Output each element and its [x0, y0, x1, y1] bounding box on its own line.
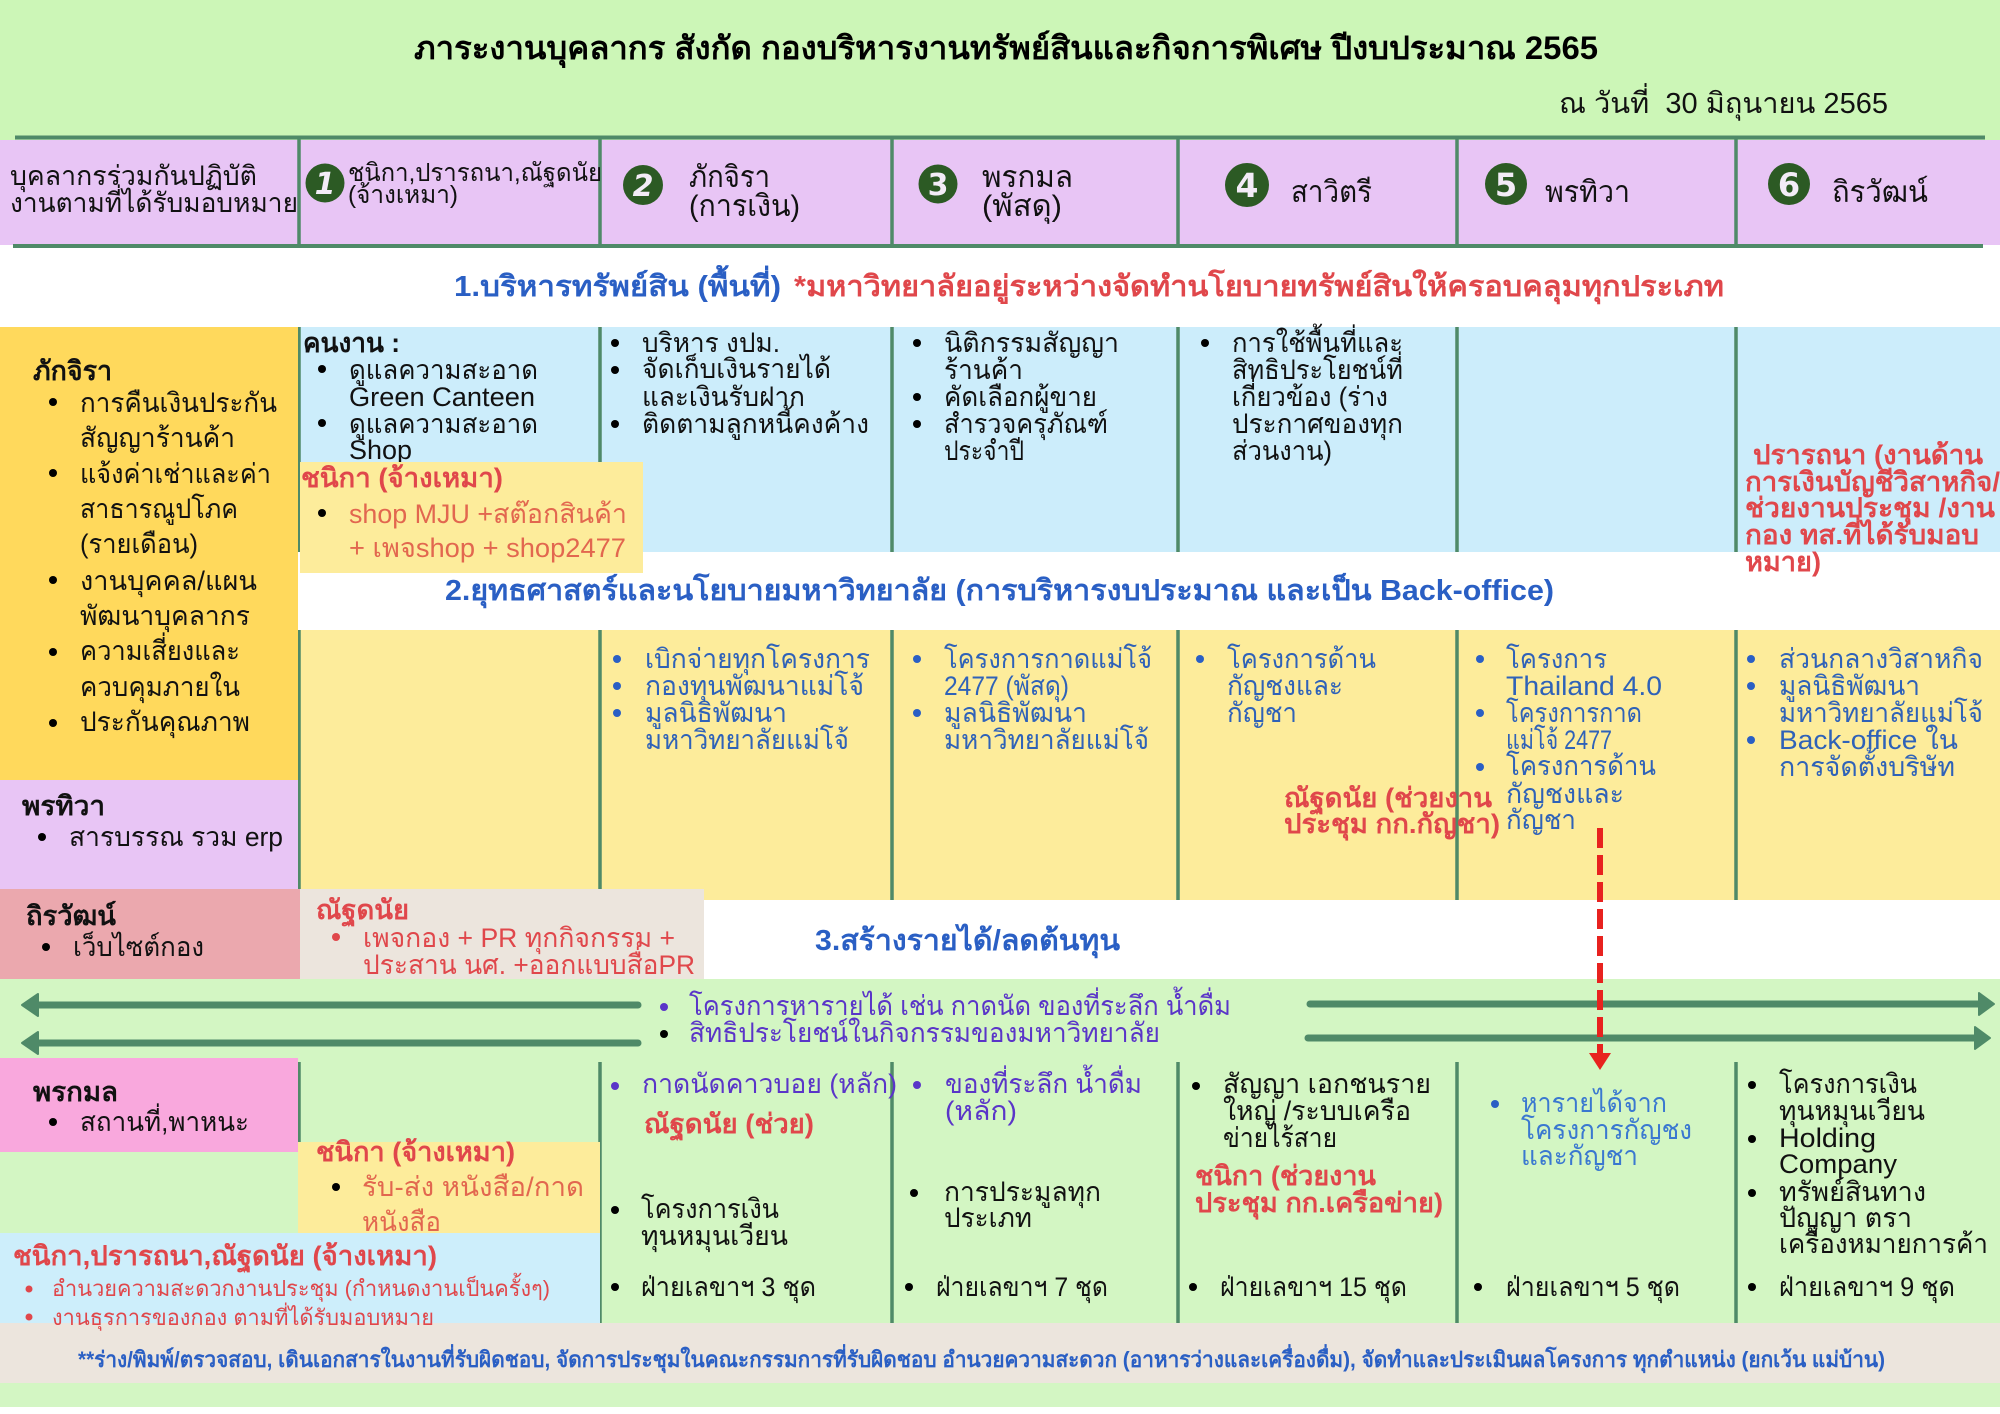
lower column 3: การประมูลทุก: [944, 1177, 1101, 1209]
row 2 column 2: มูลนิธิพัฒนา: [645, 698, 787, 729]
row 2 column 6: Back-office ใน: [1779, 724, 1958, 755]
callout: ชนิกา shop: shop MJU +สต๊อกสินค้า: [349, 499, 627, 529]
header: column 2: [623, 161, 800, 223]
row 2 column 5: กัญชา: [1506, 805, 1576, 835]
panel: ภักจิรา: ความเสี่ยงและ: [80, 632, 240, 666]
lower column 5: หารายได้จาก: [1521, 1088, 1667, 1118]
row 1 column 2: และเงินรับฝาก: [642, 382, 805, 412]
lower column 5: และกัญชา: [1521, 1141, 1638, 1171]
lower column 4: ใหญ่ /ระบบเครือ: [1223, 1095, 1411, 1126]
lower column 3: ฝ่ายเลขาฯ 7 ชุด: [936, 1272, 1108, 1304]
lower column 5: [1474, 1088, 1692, 1304]
panel: ภักจิรา: การคืนเงินประกัน: [80, 388, 277, 418]
panel: row 1 background: [299, 327, 2000, 552]
row 1 column 3: คัดเลือกผู้ขาย: [944, 382, 1097, 413]
header: intro label: บุคลากรร่วมกันปฏิบัติ: [10, 161, 257, 193]
lower column 4: ฝ่ายเลขาฯ 15 ชุด: [1220, 1272, 1407, 1304]
panel: พรทิวา: สารบรรณ รวม erp: [69, 822, 283, 852]
callout: ณัฐดนัย PR: [300, 889, 704, 980]
lower column 2: ณัฐดนัย (ช่วย): [644, 1109, 814, 1142]
header: column 6: [1768, 163, 1928, 209]
row 2 column 6: มูลนิธิพัฒนา: [1779, 671, 1920, 702]
callout: ชนิกา shop: [300, 462, 643, 573]
arrow: right bottom: [1308, 1027, 1990, 1049]
lower column 4: ประชุม กก.เครือข่าย): [1195, 1188, 1443, 1220]
callout: hired staff: [0, 1233, 600, 1331]
row 2 column 2: มหาวิทยาลัยแม่โจ้: [645, 725, 849, 755]
row 2 column 5: แม่โจ้ 2477: [1506, 725, 1612, 755]
section heading 3: 3.สร้างรายได้/ลดต้นทุน: [815, 923, 1120, 958]
callout: ปรารถนา: [1745, 440, 2000, 577]
header: column 1: 1: [315, 167, 335, 202]
arrow: left bottom: [22, 1032, 638, 1054]
row 2 column 5: กัญชงและ: [1506, 779, 1624, 809]
text: income projects: [660, 986, 1231, 1048]
header: column 1: (จ้างเหมา): [348, 181, 458, 209]
panel: พรทิวา: พรทิวา: [22, 791, 105, 821]
date: ณ วันที่ 30 มิถุนายน 2565: [1559, 83, 1888, 121]
header: column 6: 6: [1778, 166, 1800, 204]
section heading 1: [454, 264, 1724, 304]
lower column 4: [1189, 1069, 1443, 1304]
row 1 column 2: [611, 328, 869, 440]
row 1 column 4: [1201, 323, 1403, 466]
row 1 column 1: workers: คนงาน :: [303, 328, 400, 358]
panel: ภักจิรา: ประกันคุณภาพ: [80, 707, 250, 739]
row 1 column 2: ติดตามลูกหนี้คงค้าง: [642, 404, 869, 440]
header: column 2: 2: [633, 169, 653, 204]
panel: ภักจิรา: ควบคุมภายใน: [80, 671, 240, 704]
panel: ภักจิรา: ภักจิรา: [33, 356, 112, 386]
callout: ปรารถนา: หมาย): [1745, 547, 1821, 577]
callout: hired staff: งานธุรการของกอง ตามที่ได้รับมอบหมาย: [52, 1302, 434, 1331]
header: column 6: ถิรวัฒน์: [1832, 175, 1928, 209]
header: column 5: [1485, 163, 1630, 209]
row 1 column 1: workers: ดูแลความสะอาด: [349, 355, 538, 386]
header: column 2: ภักจิรา: [689, 161, 770, 194]
row 2 column 5: โครงการกาด: [1506, 698, 1642, 728]
lower column 2: กาดนัดคาวบอย (หลัก): [642, 1069, 897, 1099]
callout: ปรารถนา: ช่วยงานประชุม /งาน: [1745, 493, 1996, 525]
row 2 column 5: Thailand 4.0: [1506, 671, 1662, 701]
panel: พรกมล: [0, 1058, 298, 1152]
lower column 5: โครงการกัญชง: [1521, 1115, 1692, 1145]
header: column 3: พรกมล: [982, 161, 1073, 194]
header: column 2: (การเงิน): [689, 190, 800, 223]
callout: ณัฐดนัย PR: ประสาน นศ. +ออกแบบสื่อPR: [363, 946, 695, 980]
callout: ณัฐดนัย PR: ณัฐดนัย: [316, 895, 409, 928]
row 2 column 3: 2477 (พัสดุ): [944, 671, 1069, 703]
header: column 3: 3: [928, 168, 948, 203]
section heading 1: *มหาวิทยาลัยอยู่ระหว่างจัดทำนโยบายทรัพย์สินให้ครอบคลุมทุกประเภท: [794, 268, 1724, 304]
row 1 column 3: [913, 328, 1119, 466]
panel: row 2 background: [299, 630, 2000, 900]
header row: [0, 138, 2000, 247]
header: column 1: [306, 159, 602, 209]
lower column 6: เครื่องหมายการค้า: [1779, 1225, 1988, 1259]
row 1 column 4: ประกาศของทุก: [1232, 409, 1403, 441]
lower column 6: Holding: [1779, 1123, 1876, 1153]
panel: ภักจิรา: พัฒนาบุคลากร: [80, 601, 250, 633]
lower column 2: ฝ่ายเลขาฯ 3 ชุด: [641, 1272, 816, 1304]
row 1 column 2: จัดเก็บเงินรายได้: [642, 351, 831, 384]
panel: ภักจิรา: งานบุคคล/แผน: [80, 566, 257, 598]
lower column 5: ฝ่ายเลขาฯ 5 ชุด: [1506, 1272, 1680, 1304]
callout: hired staff: อำนวยความสะดวกงานประชุม (กำหนดงานเป็นครั้งๆ): [52, 1273, 550, 1302]
row 1 column 1: workers: Shop: [349, 435, 412, 465]
footer note: [0, 1323, 2000, 1383]
arrow: red dashed: [1589, 828, 1611, 1070]
row 2 column 4: โครงการด้าน: [1227, 644, 1376, 674]
lower column 3: [905, 1064, 1142, 1304]
callout: ปรารถนา: การเงินบัญชีวิสาหกิจ/: [1745, 467, 2000, 498]
row 2 column 3: โครงการกาดแม่โจ้: [944, 644, 1152, 674]
header: column 4: [1225, 163, 1372, 209]
row 2 column 4: กัญชงและ: [1227, 671, 1343, 701]
panel: ภักจิรา: สัญญาร้านค้า: [80, 423, 235, 453]
header: intro label: [10, 161, 298, 218]
lower column 6: โครงการเงิน: [1779, 1069, 1917, 1099]
panel: พรกมล: สถานที่,พาหนะ: [80, 1103, 249, 1137]
lower column 3: ประเภท: [944, 1203, 1032, 1233]
panel: ภักจิรา: แจ้งค่าเช่าและค่า: [80, 459, 271, 489]
row 1 column 3: ประจำปี: [944, 436, 1024, 466]
panel: ภักจิรา: (รายเดือน): [80, 529, 198, 559]
panel: ภักจิรา: สาธารณูปโภค: [80, 494, 238, 525]
lower column 4: ชนิกา (ช่วยงาน: [1195, 1161, 1377, 1191]
lower column 6: Company: [1779, 1149, 1898, 1179]
lower column 3: (หลัก): [945, 1096, 1017, 1126]
panel: ถิรวัฒน์: เว็บไซต์กอง: [73, 929, 204, 962]
callout: ณัฐดนัย PR: เพจกอง + PR ทุกกิจกรรม +: [363, 923, 675, 955]
header: column 4: สาวิตรี: [1291, 176, 1372, 209]
footer note: **ร่าง/พิมพ์/ตรวจสอบ, เดินเอกสารในงานที่รับผิดชอบ, จัดการประชุมในคณะกรรมการที่รับผิดชอบ อำนวยความสะดวก (อาหารว่างและเครื่องดื่ม), จัดทำและประเมินผลโครงการ ทุกตำแหน่ง (ยกเว้น แม่บ้าน): [78, 1343, 1885, 1374]
row 1 column 1: workers: [303, 328, 538, 465]
lower column 3: ของที่ระลึก น้ำดื่ม: [945, 1064, 1142, 1099]
header: column 3: [918, 161, 1073, 225]
row 2 column 2: กองทุนพัฒนาแม่โจ้: [645, 671, 864, 703]
row 2 column 5: [1476, 644, 1662, 835]
row 2 column 3: [913, 644, 1152, 755]
panel: ถิรวัฒน์: [0, 889, 300, 979]
header: column 5: 5: [1495, 166, 1517, 204]
header: intro label: งานตามที่ได้รับมอบหมาย: [10, 184, 298, 218]
panel: ภักจิรา: [0, 327, 298, 780]
row 1 column 3: นิติกรรมสัญญา: [944, 328, 1119, 358]
callout: ปรารถนา: กอง ทส.ที่ได้รับมอบ: [1745, 515, 1979, 550]
lower column 2: [611, 1069, 897, 1304]
section heading 1: 1.บริหารทรัพย์สิน (พื้นที่): [454, 264, 781, 303]
lower column 6: [1748, 1069, 1988, 1304]
text: income projects: สิทธิประโยชน์ในกิจกรรมของมหาวิทยาลัย: [689, 1017, 1160, 1048]
callout: ณัฐดนัย กัญชา: ณัฐดนัย (ช่วยงาน: [1284, 783, 1493, 816]
row 2 column 5: โครงการ: [1506, 644, 1607, 674]
callout: ชนิกา shop: ชนิกา (จ้างเหมา): [301, 463, 503, 493]
header: column 3: (พัสดุ): [982, 190, 1062, 225]
row 1 column 4: สิทธิประโยชน์ที่: [1232, 351, 1403, 385]
row 1 column 4: ส่วนงาน): [1232, 436, 1332, 466]
row 1 column 3: สำรวจครุภัณฑ์: [944, 408, 1108, 441]
row 2 column 3: มูลนิธิพัฒนา: [944, 698, 1087, 729]
lower column 2: โครงการเงิน: [641, 1194, 779, 1224]
header: column 1: ชนิกา,ปรารถนา,ณัฐดนัย: [348, 159, 602, 187]
row 2 column 4: กัญชา: [1227, 698, 1297, 728]
row 1 column 4: การใช้พื้นที่และ: [1232, 323, 1403, 358]
callout: ชนิกา books: หนังสือ: [362, 1207, 441, 1237]
callout: ณัฐดนัย กัญชา: [1284, 783, 1500, 841]
text: income projects: โครงการหารายได้ เช่น กาดนัด ของที่ระลึก น้ำดื่ม: [689, 986, 1231, 1021]
section heading 2: 2.ยุทธศาสตร์และนโยบายมหาวิทยาลัย (การบริหารงบประมาณ และเป็น Back-office): [445, 572, 1554, 608]
lower column 2: ทุนหมุนเวียน: [641, 1221, 788, 1253]
row 2 column 6: [1747, 644, 1983, 782]
panel: พรทิวา: [0, 780, 298, 890]
lower column 6: ฝ่ายเลขาฯ 9 ชุด: [1779, 1272, 1955, 1304]
lower column 6: ปัญญา ตรา: [1779, 1203, 1912, 1233]
row 2 column 3: มหาวิทยาลัยแม่โจ้: [944, 725, 1149, 755]
header: column 4: 4: [1236, 166, 1258, 205]
arrow: right top: [1310, 993, 1994, 1015]
arrow: left top: [22, 994, 638, 1016]
lower column 6: ทรัพย์สินทาง: [1779, 1176, 1926, 1207]
row 2 column 5: โครงการด้าน: [1506, 751, 1656, 781]
row 1 column 2: บริหาร งปม.: [642, 328, 780, 358]
row 1 column 1: workers: ดูแลความสะอาด: [349, 409, 538, 440]
row 1 column 4: เกี่ยวข้อง (ร่าง: [1232, 378, 1388, 412]
row 1 column 1: workers: Green Canteen: [349, 382, 535, 412]
lower column 6: ทุนหมุนเวียน: [1779, 1096, 1925, 1128]
lower column 4: สัญญา เอกชนราย: [1223, 1069, 1431, 1099]
row 1 column 3: ร้านค้า: [944, 355, 1023, 385]
row 2 column 4: [1196, 644, 1376, 728]
row 2 column 6: ส่วนกลางวิสาหกิจ: [1779, 644, 1983, 674]
callout: hired staff: ชนิกา,ปรารถนา,ณัฐดนัย (จ้างเหมา): [13, 1241, 437, 1274]
row 2 column 2: เบิกจ่ายทุกโครงการ: [645, 644, 870, 676]
callout: ชนิกา books: [298, 1137, 600, 1237]
row 2 column 6: การจัดตั้งบริษัท: [1779, 747, 1955, 782]
title: ภาระงานบุคลากร สังกัด กองบริหารงานทรัพย์สินและกิจการพิเศษ ปีงบประมาณ 2565: [414, 30, 1598, 69]
header: column 5: พรทิวา: [1545, 176, 1630, 209]
callout: ณัฐดนัย กัญชา: ประชุม กก.กัญชา): [1284, 809, 1500, 841]
row 2 column 6: มหาวิทยาลัยแม่โจ้: [1779, 698, 1983, 728]
lower column 4: ข่ายไร้สาย: [1223, 1123, 1337, 1153]
row 2 column 2: [613, 644, 870, 755]
panel: lower row dividers: [299, 1062, 1736, 1323]
panel: พรกมล: พรกมล: [33, 1077, 118, 1107]
callout: ชนิกา shop: + เพจshop + shop2477: [349, 533, 626, 563]
callout: ปรารถนา: ปรารถนา (งานด้าน: [1753, 440, 1984, 470]
panel: ถิรวัฒน์: ถิรวัฒน์: [26, 900, 117, 931]
callout: ชนิกา books: รับ-ส่ง หนังสือ/กาด: [362, 1172, 584, 1202]
callout: ชนิกา books: ชนิกา (จ้างเหมา): [316, 1137, 515, 1167]
